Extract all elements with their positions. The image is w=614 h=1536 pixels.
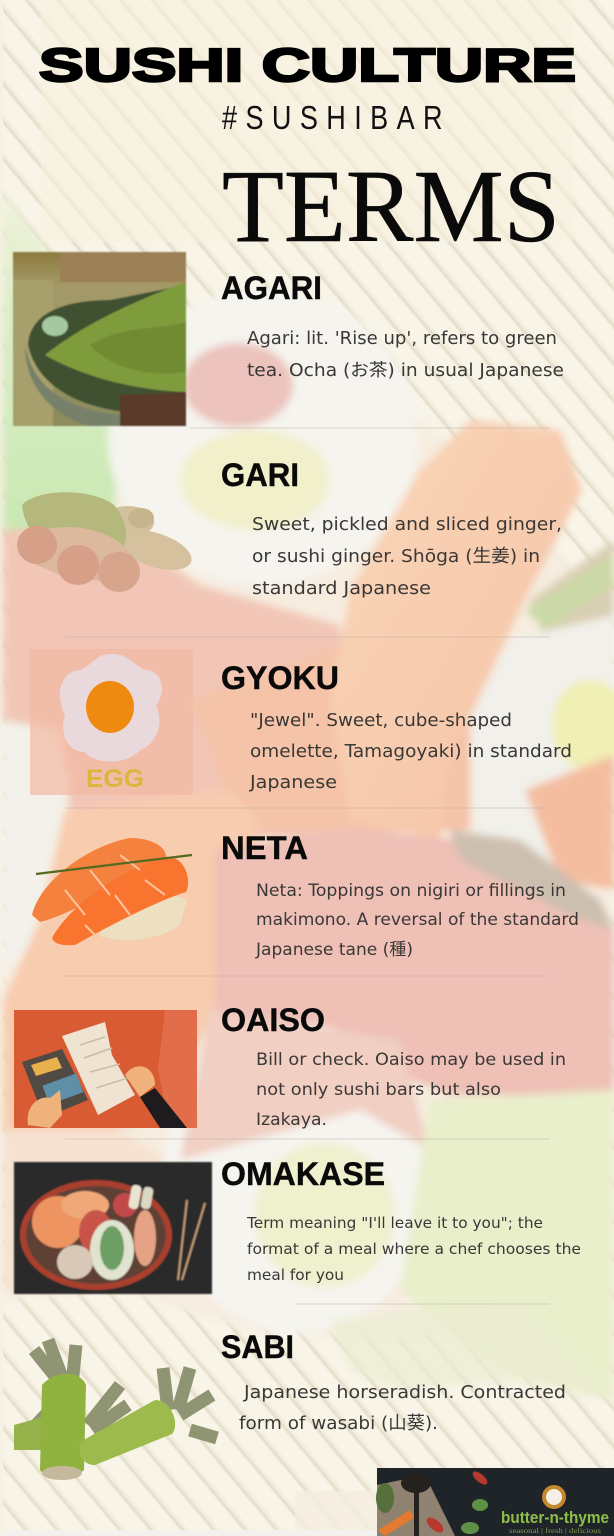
text: neta definition [255,881,579,960]
heading: omakase: OMAKASE [221,1156,385,1192]
logo: butter-n-thyme [376,1468,614,1536]
title: SUSHI CULTURE [39,39,576,91]
heading: terms: TERMS [222,149,560,264]
icon: egg [30,649,193,795]
text: gyoku definition: "Jewel". Sweet, cube-shaped [250,710,512,731]
text: neta definition: Neta: Toppings on nigiri or fillings in [256,881,566,901]
text: gari definition: Sweet, pickled and sliced ginger, [252,514,562,535]
text: sabi definition: Japanese horseradish. Contracted [243,1382,566,1403]
heading: gyoku: GYOKU [221,660,339,696]
panel: agari [13,252,564,426]
text: neta definition: makimono. A reversal of the standard [256,910,579,930]
dividers [65,428,550,1304]
text: agari definition: Agari: lit. 'Rise up', refers to green [247,329,557,349]
icon: egg: EGG [86,765,144,793]
icon: sushi platter [14,1162,212,1294]
heading: agari: AGARI [221,270,322,306]
text: gyoku definition: Japanese [249,772,337,793]
text: gari definition: standard Japanese [252,578,431,599]
panel: oaiso [14,1002,566,1130]
logo: butter-n-thyme: butter-n-thyme [501,1509,609,1527]
text: oaiso definition [256,1050,566,1130]
text: oaiso definition: Izakaya. [256,1110,327,1130]
text: omakase definition [246,1214,581,1284]
panel: neta [32,830,579,960]
text: agari definition [247,329,564,381]
text: oaiso definition: Bill or check. Oaiso may be used in [256,1050,566,1070]
text: omakase definition: Term meaning "I'll leave it to you"; the [246,1214,543,1232]
icon: ginger root [17,492,196,592]
text: sabi definition: form of wasabi (山葵). [239,1413,438,1434]
text: omakase definition: meal for you [247,1266,344,1284]
panel: gyoku [30,649,572,795]
icon: wasabi roots [14,1340,217,1480]
subtitle: #SUSHIBAR [222,101,443,137]
panel: omakase [14,1156,581,1294]
panel: sabi [14,1329,566,1480]
panel: gari [17,457,562,599]
text: sabi definition [239,1382,566,1434]
text: oaiso definition: not only sushi bars but also [256,1080,501,1100]
heading: sabi: SABI [221,1329,294,1365]
logo: butter-n-thyme: seasonal | fresh | delicious [509,1527,601,1535]
text: gari definition: or sushi ginger. Shōga (生姜) in [252,546,540,567]
heading: gari: GARI [221,457,299,493]
heading: oaiso: OAISO [221,1002,325,1038]
panel: title backdrop [41,0,573,242]
text: agari definition: tea. Ocha (お茶) in usual Japanese [247,361,564,381]
text: gyoku definition [249,710,572,793]
text: omakase definition: format of a meal where a chef chooses the [247,1240,581,1258]
heading: neta: NETA [221,830,308,866]
text: neta definition: Japanese tane (種) [255,940,413,960]
text: gyoku definition: omelette, Tamagoyaki) in standard [250,741,572,762]
icon: matcha bowl photo [13,252,186,426]
icon: salmon nigiri [32,838,192,945]
text: gari definition [252,514,562,599]
icon: bill and calculator [14,1010,197,1128]
